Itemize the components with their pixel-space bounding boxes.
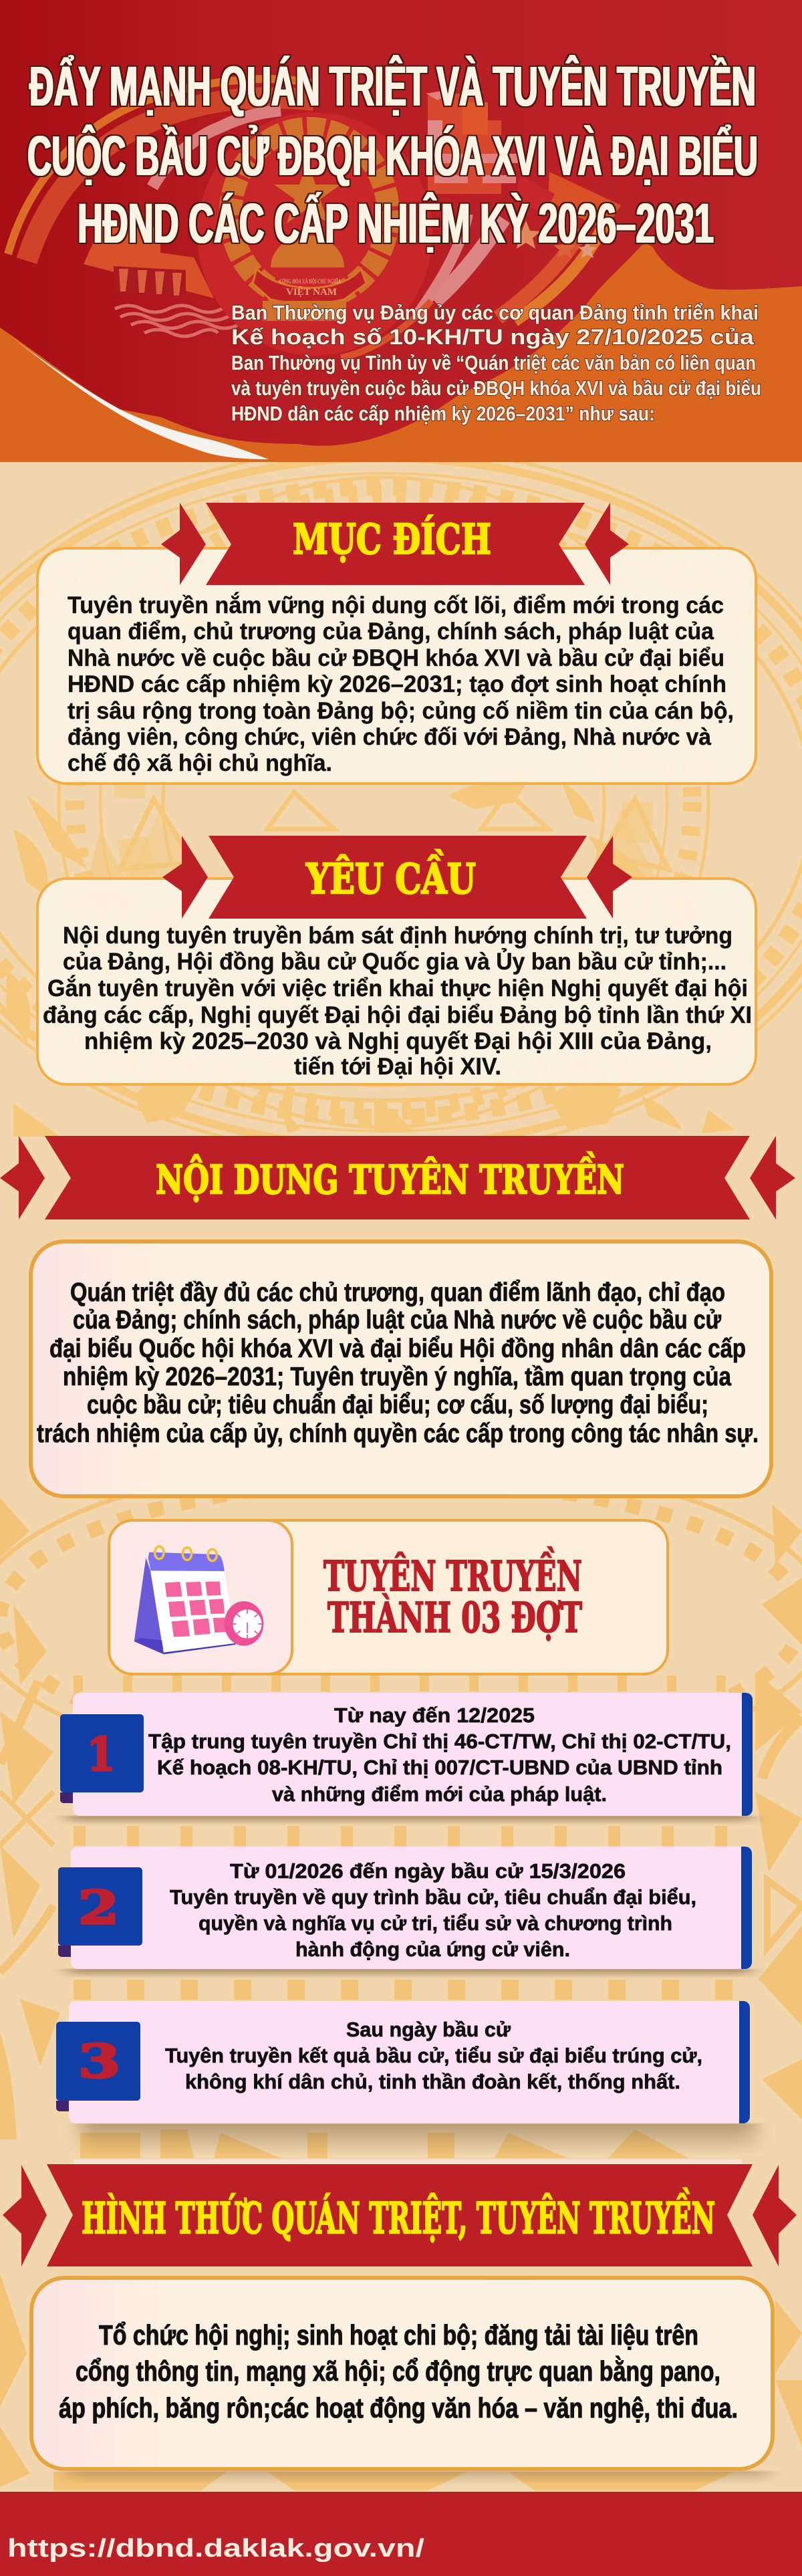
- heading: tuyên truyền thành 03 đợt: [323, 1547, 582, 1642]
- body text: hình thức: [59, 2319, 738, 2424]
- intro text: Kế hoạch số 10-KH/TU ngày 27/10/2025 của: [231, 325, 754, 349]
- badge: number 3: 3: [78, 2035, 120, 2089]
- text: đợt 2: quyền và nghĩa vụ cử tri, tiểu sử và chương trình: [198, 1911, 672, 1935]
- heading banner: nội dung tuyên truyền: [0, 1136, 795, 1219]
- panel: đợt 1: [60, 1693, 753, 1825]
- panel: hình thức: [31, 2278, 773, 2484]
- text: đợt 1: Kế hoạch 08-KH/TU, Chỉ thị 007/CT-UBND của UBND tỉnh: [157, 1756, 722, 1779]
- title: [27, 55, 758, 255]
- body text: yêu cầu: tiến tới Đại hội XIV.: [294, 1054, 501, 1080]
- badge: number 2: 2: [78, 1881, 119, 1935]
- text: đợt 3: Sau ngày bầu cử: [346, 2018, 511, 2041]
- body text: mục đích: Tuyên truyền nắm vững nội dung cốt lõi, điểm mới trong các: [68, 592, 724, 618]
- body text: mục đích: Nhà nước về cuộc bầu cử ĐBQH khóa XVI và bầu cử đại biểu: [68, 645, 724, 671]
- text: đợt 3: không khí dân chủ, tinh thần đoàn kết, thống nhất.: [185, 2070, 680, 2093]
- intro text: HĐND dân các cấp nhiệm kỳ 2026–2031” như sau:: [231, 402, 655, 425]
- badge: number 3: [56, 2022, 140, 2111]
- panel: đợt 2: [58, 1847, 752, 1978]
- national emblem watermark: [8, 79, 621, 358]
- heading: tuyên truyền thành 03 đợt: THÀNH 03 ĐỢT: [327, 1593, 582, 1642]
- intro text: [231, 301, 761, 425]
- text: đợt 1: [148, 1704, 731, 1806]
- national emblem watermark: CỘNG HÒA XÃ HỘI CHỦ NGHĨA: [279, 278, 341, 285]
- heading banner: mục đích: [161, 503, 629, 585]
- panel: tuyên truyền thành 03 đợt: [109, 1520, 668, 1674]
- footer: [0, 2492, 802, 2576]
- body text: yêu cầu: Gắn tuyên truyền với việc triển khai thực hiện Nghị quyết đại hội: [47, 975, 748, 1002]
- badge: number 2: [58, 1867, 142, 1957]
- panel: nội dung tuyên truyền: [31, 1242, 771, 1496]
- heading banner: yêu cầu: [162, 836, 632, 919]
- text: đợt 1: Từ nay đến 12/2025: [334, 1704, 535, 1727]
- body text: mục đích: chế độ xã hội chủ nghĩa.: [68, 750, 332, 776]
- badge: number 1: 1: [87, 1728, 115, 1782]
- body text: yêu cầu: của Đảng, Hội đồng bầu cử Quốc gia và Ủy ban bầu cử tỉnh;...: [63, 948, 726, 975]
- intro text: Ban Thường vụ Đảng ủy các cơ quan Đảng tỉnh triển khai: [231, 301, 759, 324]
- text: đợt 2: Tuyên truyền về quy trình bầu cử, tiêu chuẩn đại biểu,: [170, 1885, 696, 1909]
- heading banner: nội dung tuyên truyền: NỘI DUNG TUYÊN TRUYỀN: [156, 1151, 624, 1203]
- body text: mục đích: HĐND các cấp nhiệm kỳ 2026–2031; tạo đợt sinh hoạt chính: [68, 671, 726, 697]
- text: đợt 2: [170, 1859, 696, 1961]
- panel: đợt 3: [56, 2001, 755, 2155]
- heading banner: hình thức quán triệt, tuyên truyền: [3, 2159, 797, 2266]
- text: đợt 1: và những điểm mới của pháp luật.: [272, 1782, 607, 1806]
- body text: nội dung: [37, 1278, 759, 1448]
- text: đợt 2: Từ 01/2026 đến ngày bầu cử 15/3/2026: [230, 1859, 626, 1883]
- text: đợt 1: Tập trung tuyên truyền Chỉ thị 46-CT/TW, Chỉ thị 02-CT/TU,: [148, 1730, 731, 1753]
- body text: mục đích: trị sâu rộng trong toàn Đảng bộ; củng cố niềm tin của cán bộ,: [68, 698, 734, 724]
- body text: mục đích: quan điểm, chủ trương của Đảng, chính sách, pháp luật của: [68, 618, 714, 645]
- text: đợt 3: Tuyên truyền kết quả bầu cử, tiểu sử đại biểu trúng cử,: [165, 2044, 702, 2067]
- body text: yêu cầu: [43, 923, 752, 1080]
- heading: tuyên truyền thành 03 đợt: TUYÊN TRUYỀN: [323, 1547, 582, 1601]
- panel: mục đích: [37, 503, 756, 784]
- heading banner: mục đích: MỤC ĐÍCH: [293, 515, 491, 564]
- icon: calendar with clock: [134, 1546, 263, 1654]
- text: đợt 2: hành động của ứng cử viên.: [295, 1938, 570, 1961]
- body text: yêu cầu: Nội dung tuyên truyền bám sát định hướng chính trị, tư tưởng: [63, 923, 732, 949]
- national emblem watermark: VIỆT NAM: [286, 286, 337, 298]
- panel: yêu cầu: [37, 836, 756, 1084]
- body text: mục đích: đảng viên, công chức, viên chức đối với Đảng, Nhà nước và: [68, 724, 712, 750]
- body text: yêu cầu: nhiệm kỳ 2025–2030 và Nghị quyết Đại hội XIII của Đảng,: [84, 1028, 712, 1054]
- header background: [0, 0, 802, 462]
- body text: yêu cầu: đảng các cấp, Nghị quyết Đại hội đại biểu Đảng bộ tỉnh lần thứ XI: [43, 1002, 752, 1028]
- heading banner: yêu cầu: YÊU CẦU: [305, 850, 476, 903]
- badge: number 1: [60, 1714, 144, 1803]
- text: đợt 3: [165, 2018, 702, 2093]
- footer url: https://dbnd.daklak.gov.vn/: [7, 2535, 425, 2563]
- body text: mục đích: [68, 592, 734, 776]
